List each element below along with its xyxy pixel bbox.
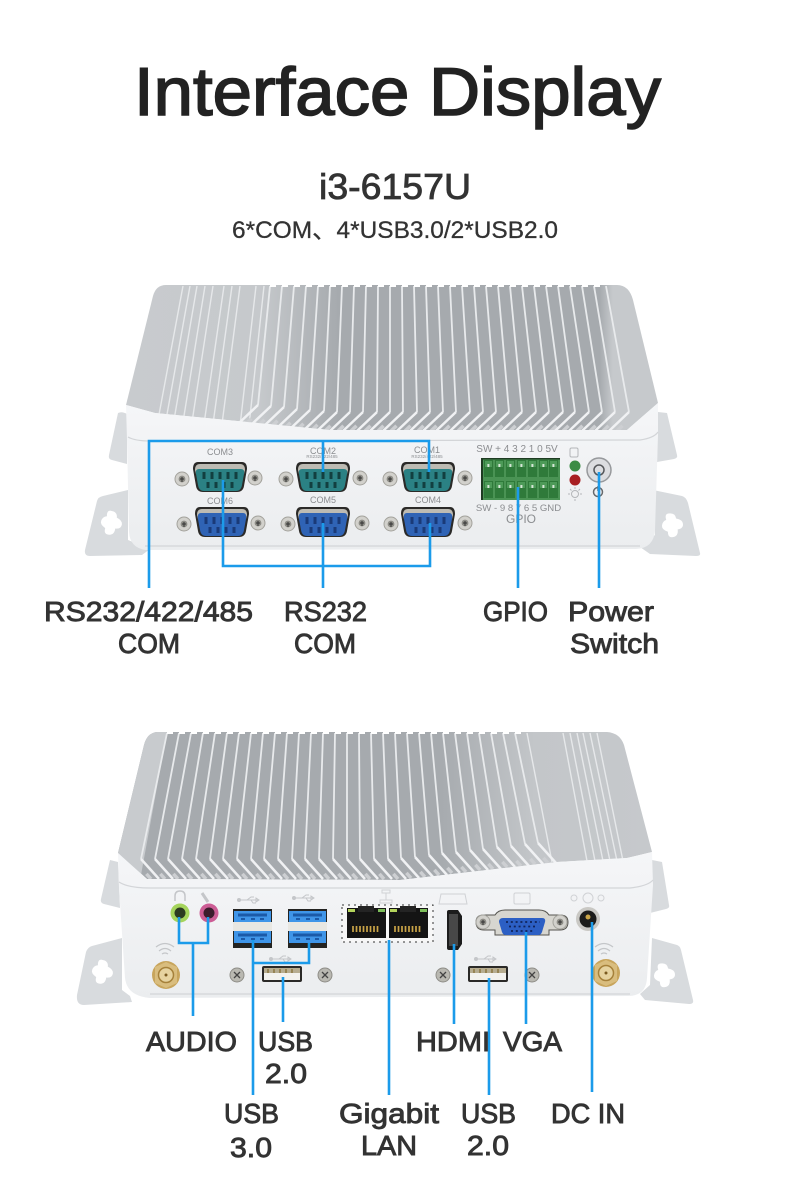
GPIO terminal block: SW + 4 3 2 1 0 5V — [476, 444, 558, 455]
GPIO terminal block: SW - 9 8 7 6 5 GND — [476, 503, 561, 514]
callout lines: front panel — [149, 441, 599, 588]
rear panel body — [118, 852, 653, 998]
device: rear panel with IO ports — [77, 732, 693, 1005]
heatsink top face — [118, 732, 652, 880]
power button — [587, 458, 611, 496]
COM port labels: RS232/422/485 — [306, 454, 338, 459]
COM port labels: COM5 — [310, 495, 336, 505]
HDMI port — [439, 894, 467, 950]
label: USB 2.0 right — [461, 1098, 516, 1161]
VGA port — [476, 893, 568, 935]
label: RS232/422/485 COM: COM — [118, 628, 180, 659]
label: Gigabit LAN: Gigabit — [339, 1098, 439, 1129]
status LEDs — [568, 448, 582, 501]
COM port labels: RS232/422/485 — [411, 454, 443, 459]
COM port labels: COM3 — [207, 447, 233, 457]
label: USB 2.0 left: 2.0 — [265, 1058, 307, 1089]
label: Gigabit LAN: LAN — [361, 1130, 417, 1161]
label: Power Switch: Power — [568, 596, 654, 627]
model heading: i3-6157U — [319, 166, 471, 207]
label: USB 2.0 right: USB — [461, 1098, 516, 1129]
left USB 2.0 port — [230, 956, 332, 982]
label: HDMI: HDMI — [416, 1026, 490, 1057]
COM ports — [175, 462, 472, 537]
front panel body — [126, 403, 658, 550]
label: RS232 COM: COM — [294, 628, 356, 659]
mounting ears — [85, 412, 700, 556]
device: front panel with COM ports — [85, 285, 700, 556]
label: Gigabit LAN — [339, 1098, 439, 1161]
COM port labels: COM6 — [207, 496, 233, 506]
label: USB 3.0 — [224, 1098, 279, 1163]
callout lines: rear panel — [179, 917, 592, 1095]
DC jack — [571, 893, 604, 931]
audio jacks — [170, 891, 218, 922]
label: GPIO: GPIO — [483, 596, 548, 627]
label: RS232 COM — [284, 596, 367, 659]
label: Power Switch — [568, 596, 659, 659]
label: RS232/422/485 COM: RS232/422/485 — [44, 596, 253, 627]
COM port labels: COM1 — [414, 445, 440, 455]
Wi-Fi antenna connectors — [152, 944, 620, 989]
COM port labels: COM4 — [415, 495, 441, 505]
USB 3.0 ports — [233, 895, 327, 948]
COM port labels: COM2 — [310, 446, 336, 456]
label: AUDIO: AUDIO — [146, 1026, 237, 1057]
label: VGA: VGA — [503, 1026, 562, 1057]
label: USB 3.0: 3.0 — [230, 1132, 272, 1163]
mounting ears — [77, 860, 693, 1005]
GPIO terminal block: GPIO — [506, 512, 536, 526]
label: Power Switch: Switch — [570, 628, 659, 659]
GPIO terminal block — [476, 444, 561, 526]
label: USB 2.0 right: 2.0 — [467, 1130, 509, 1161]
label: RS232/422/485 COM — [44, 596, 253, 659]
port summary: 6*COM、4*USB3.0/2*USB2.0 — [232, 217, 558, 244]
label: DC IN: DC IN — [551, 1098, 625, 1129]
COM port labels — [207, 445, 443, 506]
right USB 2.0 port — [436, 956, 539, 982]
title: Interface Display — [134, 54, 661, 130]
label: RS232 COM: RS232 — [284, 596, 367, 627]
label: USB 3.0: USB — [224, 1098, 279, 1129]
label: USB 2.0 left — [258, 1026, 313, 1089]
gigabit LAN ports — [342, 890, 433, 942]
heatsink top face — [126, 285, 658, 430]
label: USB 2.0 left: USB — [258, 1026, 313, 1057]
